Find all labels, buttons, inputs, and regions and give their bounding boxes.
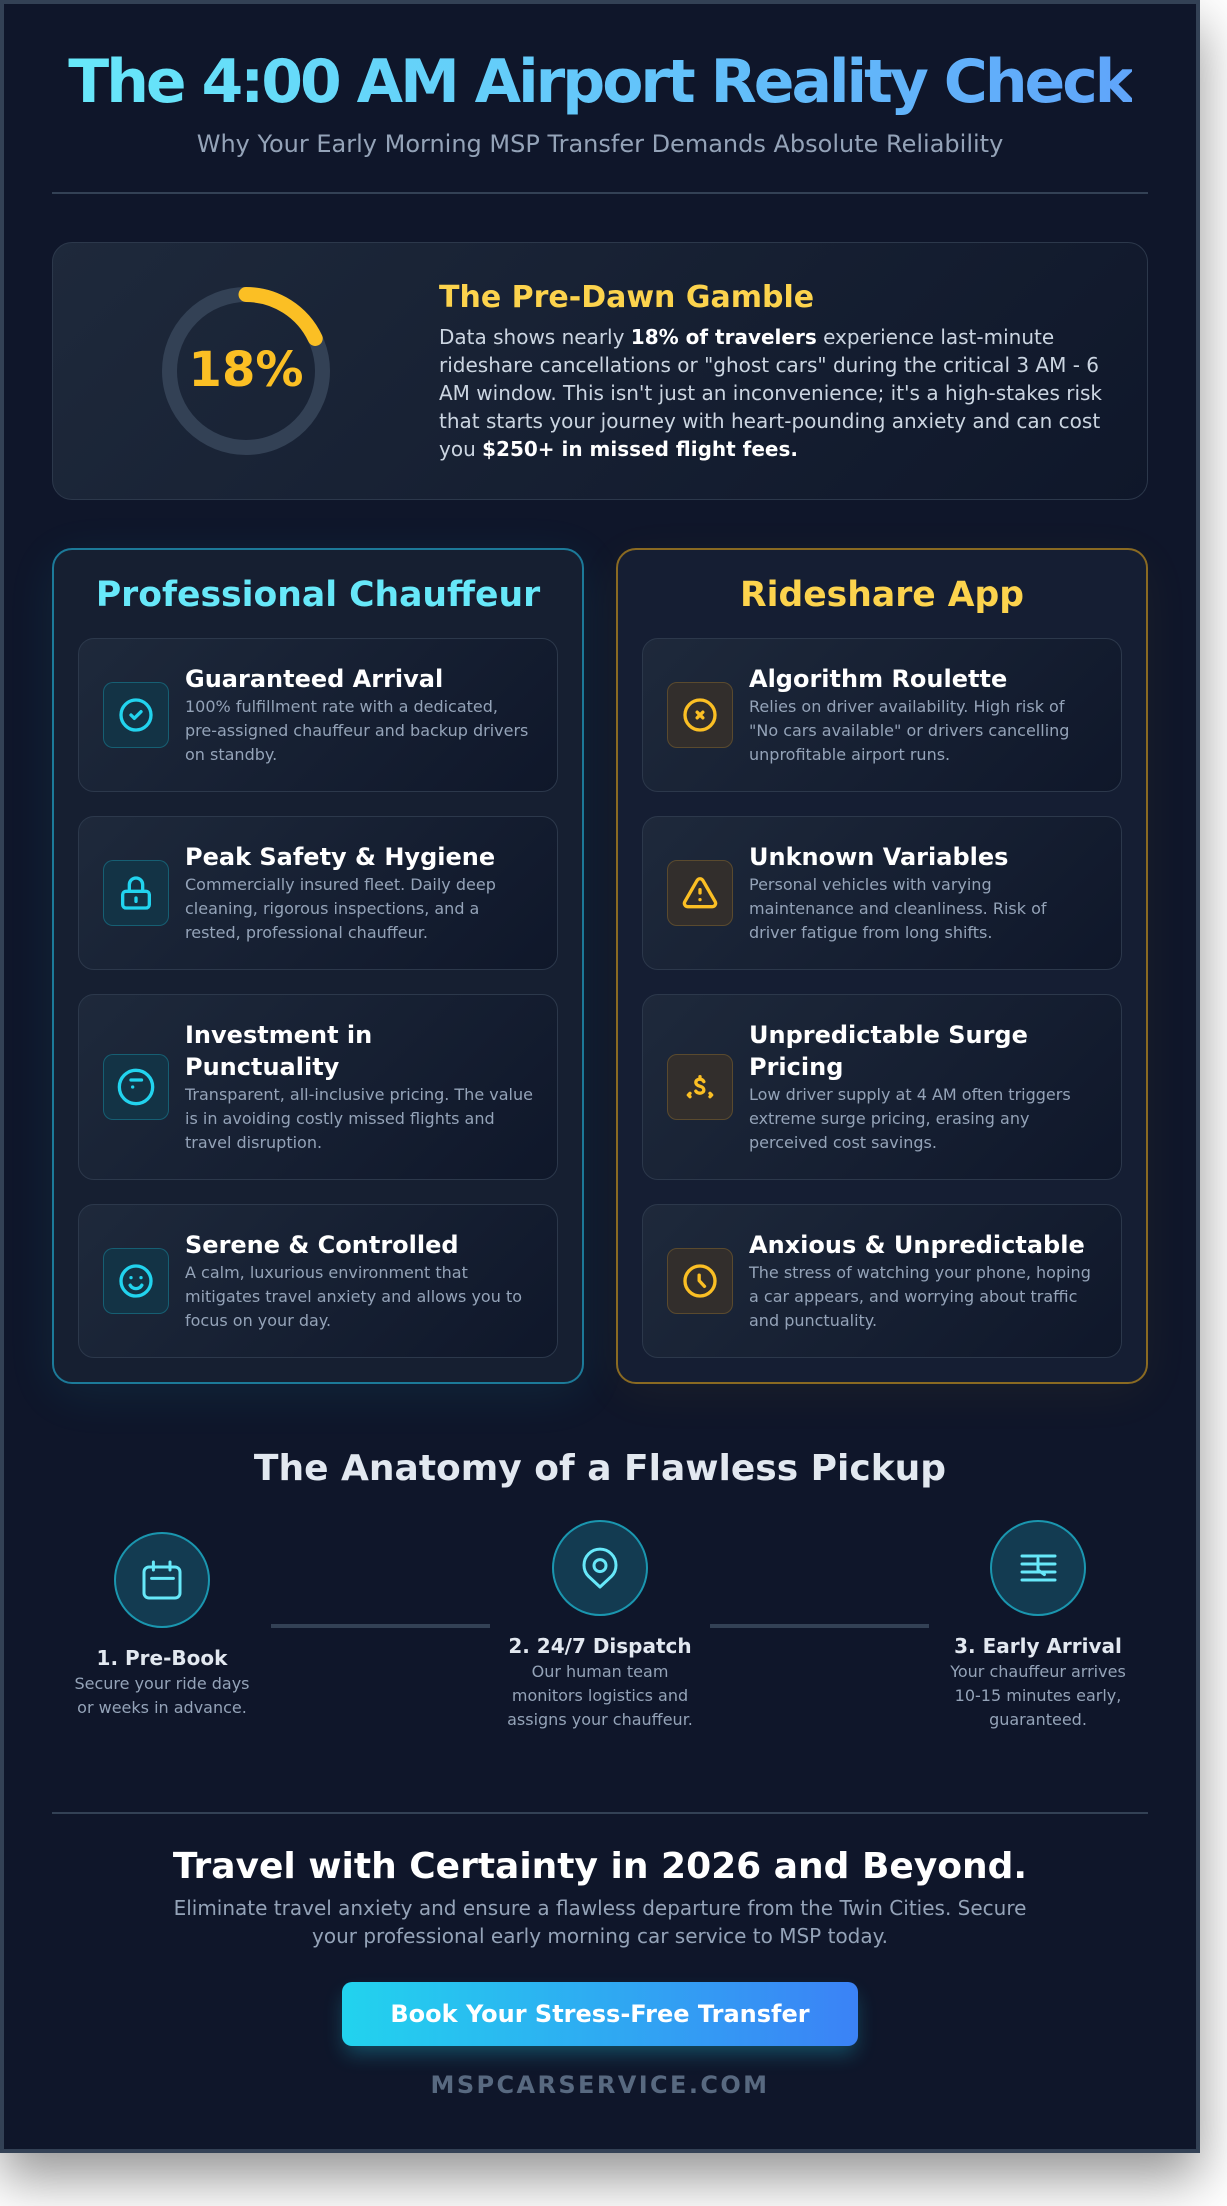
arrow: connector 1	[271, 1624, 490, 1628]
card heading: Pricing	[749, 1053, 843, 1081]
card text: rested, professional chauffeur.	[185, 923, 428, 942]
card text: is in avoiding costly missed flights and	[185, 1109, 495, 1128]
step heading: 1. Pre-Book	[97, 1646, 227, 1670]
card heading	[185, 1021, 372, 1081]
card: algorithm roulette	[642, 638, 1122, 792]
step text: Your chauffeur arrives	[950, 1662, 1126, 1681]
step text: 10-15 minutes early,	[955, 1686, 1121, 1705]
card text	[185, 1263, 522, 1330]
step text: guaranteed.	[989, 1710, 1087, 1729]
icon: surge dollar	[667, 1054, 733, 1120]
card text: and punctuality.	[749, 1311, 877, 1330]
step 1: pre-book	[74, 1532, 250, 1717]
section heading: flawless pickup: The Anatomy of a Flawless Pickup	[254, 1448, 946, 1489]
card text: focus on your day.	[185, 1311, 331, 1330]
step 2: dispatch	[507, 1520, 693, 1729]
column heading: Rideshare App	[740, 575, 1024, 615]
step text: assigns your chauffeur.	[507, 1710, 693, 1729]
card text: pre-assigned chauffeur and backup drivers	[185, 721, 528, 740]
icon: calendar	[114, 1532, 210, 1628]
step text: Our human team	[532, 1662, 668, 1681]
button: book transfer	[342, 1982, 858, 2046]
card text	[749, 1085, 1071, 1152]
card heading: Unknown Variables	[749, 843, 1008, 871]
panel: professional chauffeur	[52, 548, 584, 1384]
icon: schedule lines	[990, 1520, 1086, 1616]
stat heading: The Pre-Dawn Gamble	[439, 280, 814, 315]
card text	[749, 875, 1047, 942]
column heading: Professional Chauffeur	[96, 575, 540, 615]
card heading	[749, 1021, 1028, 1081]
card text: perceived cost savings.	[749, 1133, 937, 1152]
stat value: 18%	[189, 342, 303, 398]
card text: a car appears, and worrying about traffic	[749, 1287, 1077, 1306]
card text: mitigates travel anxiety and allows you to	[185, 1287, 522, 1306]
card text: on standby.	[185, 745, 277, 764]
step text	[74, 1674, 250, 1717]
donut chart: 18%	[162, 287, 330, 455]
card text: maintenance and cleanliness. Risk of	[749, 899, 1047, 918]
stat body text	[439, 325, 1102, 461]
card: guaranteed arrival	[78, 638, 558, 792]
icon: clock	[667, 1248, 733, 1314]
call to action text: your professional early morning car service to MSP today.	[312, 1924, 888, 1948]
card text: Transparent, all-inclusive pricing. The value	[185, 1085, 533, 1104]
subtitle: Why Your Early Morning MSP Transfer Demands Absolute Reliability	[197, 130, 1003, 158]
card text: Personal vehicles with varying	[749, 875, 992, 894]
card text: cleaning, rigorous inspections, and a	[185, 899, 479, 918]
arrow: connector 2	[710, 1624, 929, 1628]
step text: or weeks in advance.	[77, 1698, 247, 1717]
stat body text: rideshare cancellations or "ghost cars" during the critical 3 AM - 6	[439, 353, 1099, 377]
stat body text: AM window. This isn't just an inconvenience; it's a high-stakes risk	[439, 381, 1102, 405]
card: anxious and unpredictable	[642, 1204, 1122, 1358]
stat body text: that starts your journey with heart-pounding anxiety and can cost	[439, 409, 1100, 433]
card text: driver fatigue from long shifts.	[749, 923, 992, 942]
step text	[507, 1662, 693, 1729]
card heading: Punctuality	[185, 1053, 339, 1081]
card heading: Algorithm Roulette	[749, 665, 1007, 693]
step text: Secure your ride days	[74, 1674, 250, 1693]
card text	[185, 697, 528, 764]
card: serene and controlled	[78, 1204, 558, 1358]
card text	[749, 697, 1069, 764]
card text	[185, 875, 496, 942]
card text	[184, 1085, 533, 1152]
card text: Low driver supply at 4 AM often triggers	[749, 1085, 1071, 1104]
step text: monitors logistics and	[512, 1686, 688, 1705]
card text: extreme surge pricing, erasing any	[749, 1109, 1029, 1128]
step heading: 3. Early Arrival	[954, 1634, 1122, 1658]
card heading: Peak Safety & Hygiene	[185, 843, 495, 871]
icon: smile	[103, 1248, 169, 1314]
stat body text: you $250+ in missed flight fees.	[439, 437, 798, 461]
card heading: Investment in	[185, 1021, 372, 1049]
card heading: Unpredictable Surge	[749, 1021, 1028, 1049]
card text: 100% fulfillment rate with a dedicated,	[185, 697, 498, 716]
card text: "No cars available" or drivers cancelling	[749, 721, 1069, 740]
call to action heading: Travel with Certainty in 2026 and Beyond.	[173, 1846, 1027, 1887]
step 3: early arrival	[950, 1520, 1126, 1729]
call to action text: Eliminate travel anxiety and ensure a flawless departure from the Twin Cities. Secure	[174, 1896, 1026, 1920]
card heading: Serene & Controlled	[185, 1231, 459, 1259]
icon: warning triangle	[667, 860, 733, 926]
card text	[748, 1263, 1091, 1330]
title: The 4:00 AM Airport Reality Check	[68, 47, 1132, 117]
card: investment in punctuality	[78, 994, 558, 1180]
card text: travel disruption.	[185, 1133, 322, 1152]
card heading: Guaranteed Arrival	[185, 665, 443, 693]
panel: rideshare app	[616, 548, 1148, 1384]
card: unknown variables	[642, 816, 1122, 970]
card text: Commercially insured fleet. Daily deep	[185, 875, 496, 894]
card text: A calm, luxurious environment that	[185, 1263, 468, 1282]
stat body text: Data shows nearly 18% of travelers experience last-minute	[439, 325, 1054, 349]
website footer: MSPCARSERVICE.COM	[431, 2071, 769, 2099]
card text: Relies on driver availability. High risk of	[749, 697, 1064, 716]
panel: pre-dawn gamble stat	[52, 242, 1148, 500]
card text: The stress of watching your phone, hoping	[749, 1263, 1091, 1282]
card text: unprofitable airport runs.	[749, 745, 950, 764]
icon: check circle	[103, 682, 169, 748]
icon: map pin	[552, 1520, 648, 1616]
card: surge pricing	[642, 994, 1122, 1180]
icon: x circle	[667, 682, 733, 748]
icon: lock	[103, 860, 169, 926]
call to action text	[174, 1896, 1026, 1948]
button: book transfer: Book Your Stress-Free Transfer	[390, 2000, 810, 2028]
card heading: Anxious & Unpredictable	[749, 1231, 1085, 1259]
icon: dial	[103, 1054, 169, 1120]
step text	[950, 1662, 1126, 1729]
card: peak safety	[78, 816, 558, 970]
step heading: 2. 24/7 Dispatch	[508, 1634, 692, 1658]
